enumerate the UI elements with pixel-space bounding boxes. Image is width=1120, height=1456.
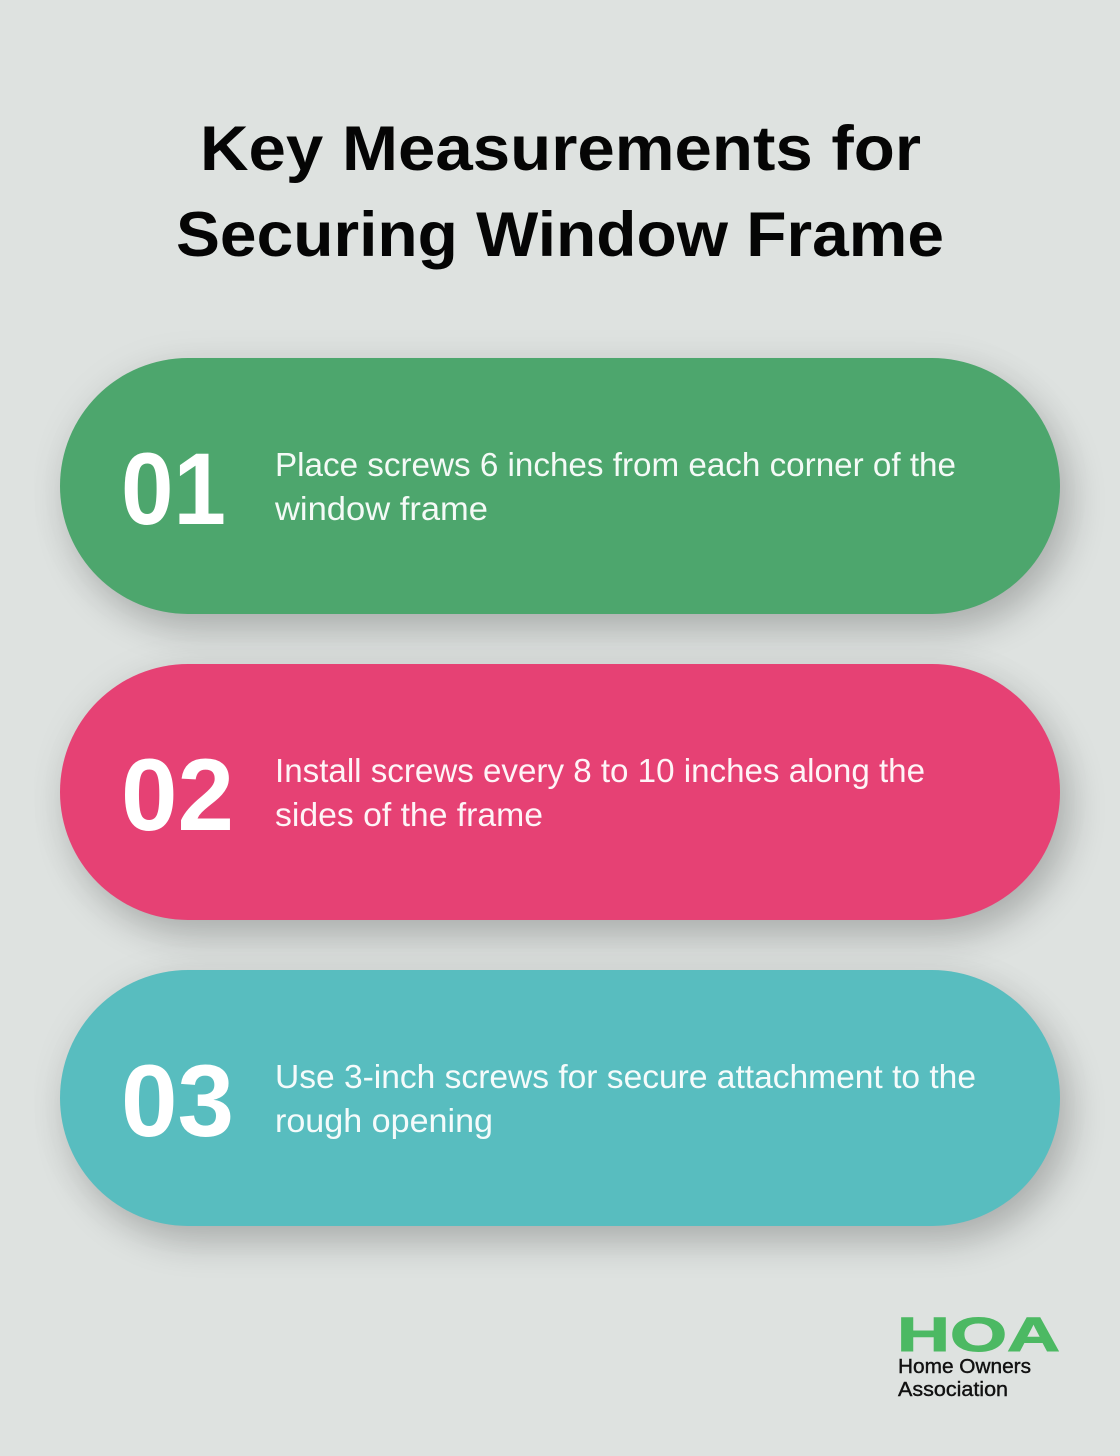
step number 01: 01: [121, 432, 226, 546]
panel: step 03: [60, 970, 1060, 1226]
logo: HOA Home Owners Association: Home Owners: [898, 1356, 1031, 1378]
step text 02: Install screws every 8 to 10 inches along the: [275, 752, 925, 789]
step text 01: window frame: [274, 490, 488, 527]
title: Key Measurements for: [200, 114, 921, 184]
logo: HOA Home Owners Association: Association: [898, 1379, 1008, 1401]
step number 03: 03: [121, 1044, 234, 1158]
step text 03: rough opening: [275, 1102, 493, 1139]
logo: HOA Home Owners Association: HOA: [897, 1309, 1060, 1362]
step text 02: sides of the frame: [275, 796, 543, 833]
panel: step 02: [60, 664, 1060, 920]
title: Securing Window Frame: [176, 200, 944, 270]
title: [176, 114, 944, 270]
step text 01: Place screws 6 inches from each corner of the: [275, 446, 956, 483]
step text 03: Use 3-inch screws for secure attachment to the: [275, 1058, 976, 1095]
panel: step 01: [60, 358, 1060, 614]
step number 02: 02: [121, 738, 234, 852]
